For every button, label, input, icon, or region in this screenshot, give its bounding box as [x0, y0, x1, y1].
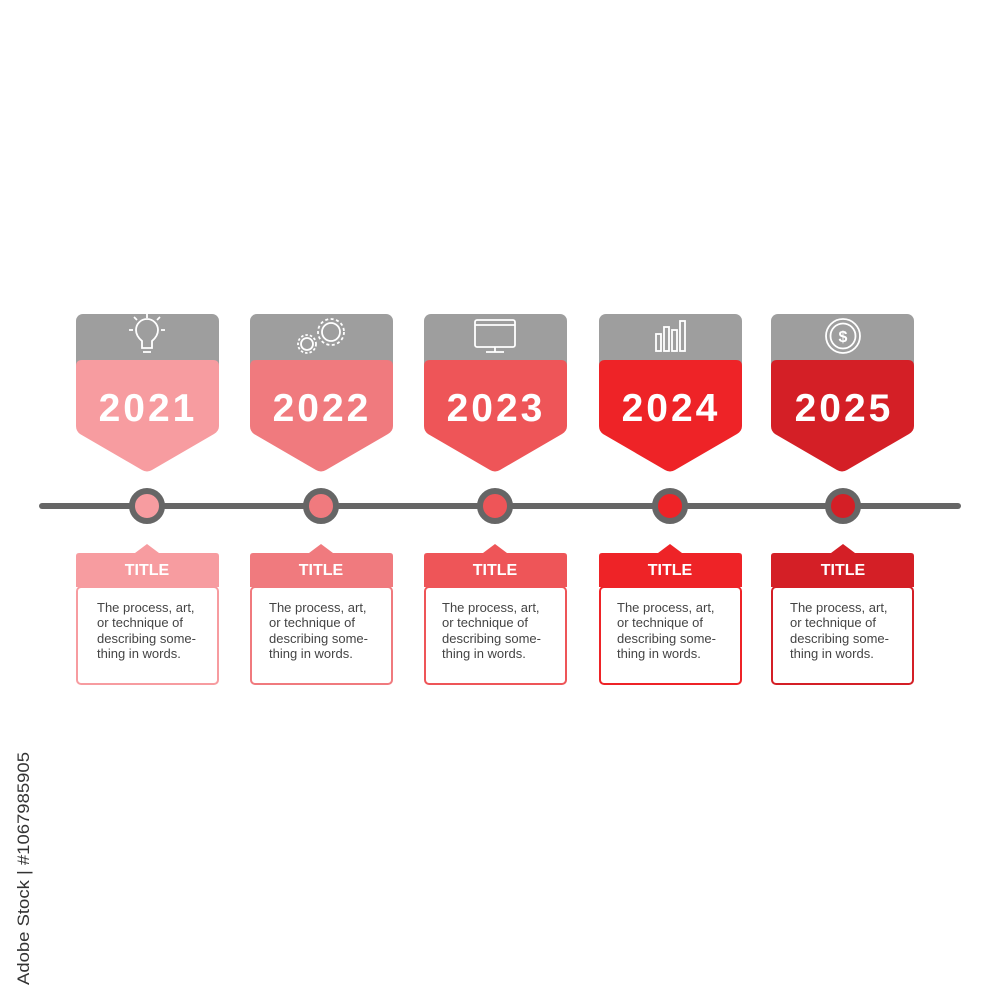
node 2021	[132, 491, 162, 521]
icon: dollar coin: $	[839, 329, 848, 346]
watermark id text: Adobe Stock | #1067985905	[14, 752, 33, 985]
banner 2024: 2024	[622, 387, 720, 430]
card 2024: thing in words.	[617, 646, 701, 661]
card 2023	[424, 544, 567, 684]
card 2021: describing some-	[97, 631, 196, 646]
icon: gears	[298, 319, 344, 353]
banner 2025: 2025	[795, 387, 893, 430]
card 2022: TITLE	[299, 562, 344, 579]
card 2025: The process, art,	[790, 600, 888, 615]
card 2025: thing in words.	[790, 646, 874, 661]
card 2023: thing in words.	[442, 646, 526, 661]
icon: bar chart	[656, 321, 685, 351]
banner 2021: 2021	[99, 387, 197, 430]
card 2025: describing some-	[790, 631, 889, 646]
step 2022	[250, 314, 393, 684]
card 2025: or technique of	[790, 615, 876, 630]
icon: dollar coin	[826, 319, 860, 353]
card 2023: describing some-	[442, 631, 541, 646]
card 2021: or technique of	[97, 615, 183, 630]
card 2022: or technique of	[269, 615, 355, 630]
step 2021	[76, 314, 219, 684]
node 2022	[306, 491, 336, 521]
card 2022	[250, 544, 393, 684]
card 2023: or technique of	[442, 615, 528, 630]
card 2024: The process, art,	[617, 600, 715, 615]
card 2022: describing some-	[269, 631, 368, 646]
card 2021: The process, art,	[97, 600, 195, 615]
step 2025	[771, 314, 914, 684]
banner 2022	[250, 314, 393, 472]
card 2022: The process, art,	[269, 600, 367, 615]
card 2024: describing some-	[617, 631, 716, 646]
card 2024	[599, 544, 742, 684]
node 2023	[480, 491, 510, 521]
card 2023: The process, art,	[442, 600, 540, 615]
card 2022: thing in words.	[269, 646, 353, 661]
banner 2025	[771, 314, 914, 472]
banner 2023: 2023	[447, 387, 545, 430]
step 2024	[599, 314, 742, 684]
card 2024: or technique of	[617, 615, 703, 630]
icon: light bulb	[129, 314, 165, 352]
banner 2021	[76, 314, 219, 472]
card 2021: thing in words.	[97, 646, 181, 661]
icon: monitor	[475, 320, 515, 352]
card 2025	[771, 544, 914, 684]
step 2023	[424, 314, 567, 684]
banner 2024	[599, 314, 742, 472]
card 2024: TITLE	[648, 562, 693, 579]
banner 2023	[424, 314, 567, 472]
card 2021: TITLE	[125, 562, 170, 579]
timeline line	[42, 503, 958, 509]
node 2025	[828, 491, 858, 521]
banner 2022: 2022	[273, 387, 371, 430]
card 2023: TITLE	[473, 562, 518, 579]
card 2021	[76, 544, 219, 684]
card 2025: TITLE	[821, 562, 866, 579]
node 2024	[655, 491, 685, 521]
